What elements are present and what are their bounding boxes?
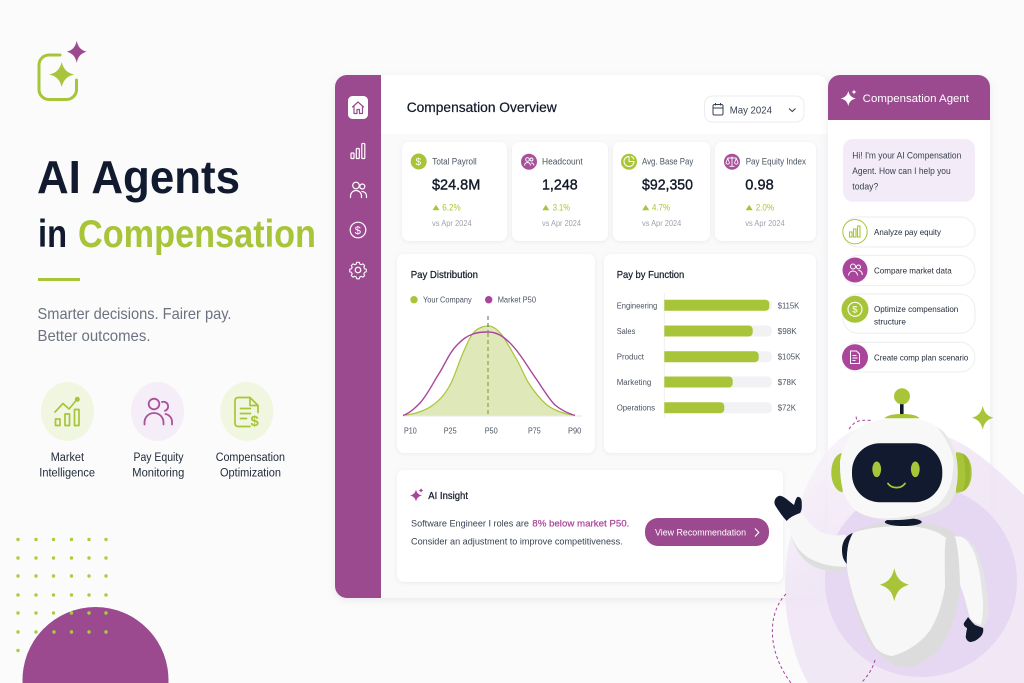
panel: ai insight: Consider an adjustment to improve competitiveness. (411, 536, 623, 547)
bar: operations: Operations (617, 404, 655, 413)
dashed orbit lines (772, 416, 875, 683)
bar: product: Product (617, 353, 645, 362)
action: analyze pay equity (843, 217, 975, 247)
action: optimize compensation structure: Optimize compensation (874, 304, 959, 314)
legend: Your Company (423, 296, 472, 305)
kpi: avg base pay: 4.7% (652, 202, 670, 212)
bar: sales: $98K (778, 327, 797, 336)
face screen (852, 443, 942, 502)
feature: pay equity monitoring: Monitoring (132, 468, 184, 480)
panel: pay by function (604, 254, 816, 453)
panel: pay distribution: Pay Distribution (411, 269, 478, 281)
bell curve chart: P50 (485, 426, 498, 436)
feature: market intelligence: Intelligence (39, 468, 95, 480)
right arm and hand (950, 536, 989, 642)
logo (39, 41, 87, 100)
heading: Compensation Overview (407, 99, 558, 115)
chat bubble: Hi! I'm your AI Compensation (852, 151, 961, 161)
title: in (38, 213, 67, 256)
panel: ai insight: 8% below market P50. (532, 518, 629, 529)
panel: ai insight (397, 470, 783, 582)
bell curve chart (403, 316, 582, 436)
feature: pay equity monitoring: Pay Equity (134, 452, 184, 464)
icon: dollar (350, 222, 366, 238)
feature: market intelligence: Market (51, 452, 85, 464)
bar: operations (617, 402, 797, 413)
icon: people (350, 182, 366, 198)
kpi: total payroll: vs Apr 2024 (432, 219, 472, 228)
title: Compensation (78, 213, 316, 256)
ears (831, 452, 972, 493)
kpi: total payroll: 6.2% (442, 202, 461, 212)
bar: engineering: $115K (778, 301, 800, 310)
bell curve chart: P75 (528, 426, 541, 436)
action: compare market data (842, 256, 975, 286)
bar: product (617, 351, 801, 362)
kpi: avg base pay: vs Apr 2024 (642, 219, 682, 228)
tagline: Smarter decisions. Fairer pay. (38, 306, 232, 323)
title (37, 151, 316, 256)
sidebar (335, 75, 381, 598)
bar: marketing: Marketing (617, 378, 651, 387)
icon: gear (350, 262, 366, 279)
kpi: avg base pay: Avg. Base Pay (642, 156, 694, 166)
kpi: avg base pay (613, 142, 710, 241)
chat bubble: Agent. How can I help you (852, 166, 951, 176)
bar: product: $105K (778, 353, 801, 362)
panel: ai insight: Software Engineer I roles are (411, 518, 529, 529)
kpi: pay equity index: 2.0% (756, 202, 774, 212)
date selector (704, 96, 804, 122)
kpi: pay equity index: 0.98 (745, 176, 774, 194)
robot (774, 388, 989, 667)
bell curve chart: P25 (444, 426, 457, 436)
kpi: headcount: Headcount (542, 156, 583, 166)
bar: engineering (617, 300, 800, 311)
button (645, 518, 769, 546)
date selector: May 2024 (730, 104, 772, 116)
body (847, 521, 960, 667)
feature: compensation optimization: $ (250, 413, 260, 430)
head (840, 418, 958, 520)
feature: market intelligence (39, 382, 95, 480)
bar: sales (617, 326, 797, 336)
kpi: headcount: 1,248 (542, 176, 578, 194)
tagline: Better outcomes. (38, 328, 150, 345)
kpi: pay equity index: vs Apr 2024 (745, 219, 785, 228)
sparkle (972, 406, 993, 430)
dashboard panel (335, 75, 828, 598)
kpi: pay equity index (715, 142, 816, 241)
title: AI Agents (37, 151, 240, 203)
bar: sales: Sales (617, 327, 635, 336)
kpi: total payroll: $24.8M (432, 176, 480, 194)
bar: operations: $72K (778, 404, 797, 413)
kpi: headcount: 3.1% (553, 202, 570, 212)
icon: dollar: $ (355, 225, 361, 237)
panel: compensation agent (828, 75, 990, 598)
neck (885, 518, 922, 526)
agent header (828, 75, 990, 120)
antenna (884, 388, 920, 418)
kpi: avg base pay: $92,350 (642, 176, 693, 194)
panel: ai insight: AI Insight (428, 491, 468, 502)
agent header: Compensation Agent (863, 93, 969, 105)
background circles behind robot (785, 425, 1024, 683)
action: optimize compensation structure: $ (852, 305, 858, 316)
kpi: pay equity index: Pay Equity Index (746, 156, 806, 166)
kpi: total payroll (402, 142, 507, 241)
chat bubble: today? (852, 181, 878, 191)
icon: home (348, 96, 368, 119)
icon: bars (351, 144, 365, 158)
action: optimize compensation structure: structure (874, 317, 906, 327)
feature: compensation optimization (216, 382, 285, 480)
kpi: total payroll: Total Payroll (432, 156, 477, 166)
tagline (38, 306, 232, 345)
feature: pay equity monitoring (131, 382, 184, 480)
feature: compensation optimization: Compensation (216, 452, 285, 464)
bar: engineering: Engineering (617, 301, 657, 310)
bar: marketing (617, 376, 797, 388)
bell curve chart: P10 (404, 426, 417, 436)
decorative purple half circle (23, 607, 169, 683)
panel: pay by function: Pay by Function (617, 269, 684, 281)
legend (410, 296, 537, 305)
panel: pay distribution (397, 254, 595, 453)
action: create comp plan scenario (842, 342, 975, 372)
action: create comp plan scenario: Create comp plan scenario (874, 352, 969, 362)
action: analyze pay equity: Analyze pay equity (874, 227, 942, 237)
kpi: headcount: vs Apr 2024 (542, 219, 582, 228)
kpi: total payroll: $ (416, 157, 422, 168)
bar: marketing: $78K (778, 378, 797, 387)
chat bubble (843, 139, 975, 202)
button: View Recommendation (655, 528, 746, 538)
decorative dot grid (16, 538, 108, 652)
bell curve chart: P90 (568, 426, 582, 436)
legend: Market P50 (498, 296, 537, 305)
action: optimize compensation structure (842, 294, 975, 333)
kpi: headcount (512, 142, 608, 241)
action: compare market data: Compare market data (874, 265, 952, 275)
left arm and hand (774, 496, 853, 572)
feature: compensation optimization: Optimization (220, 468, 281, 480)
